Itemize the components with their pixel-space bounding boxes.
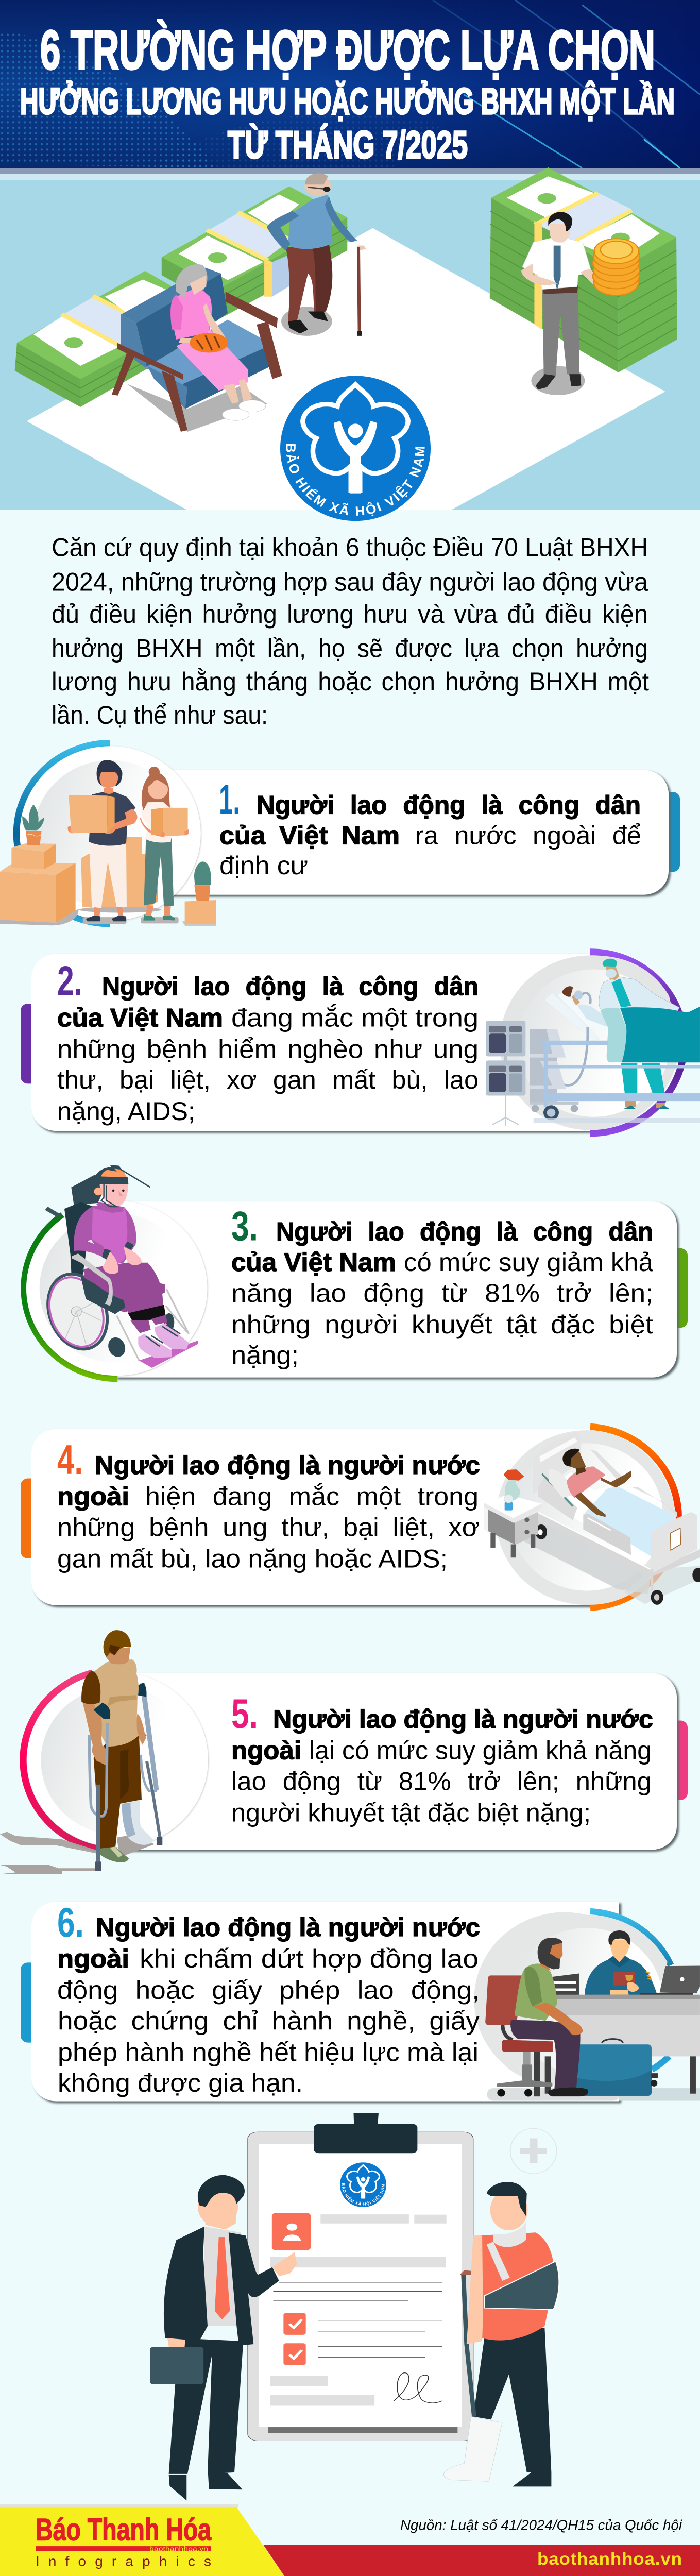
chair and woman bbox=[112, 264, 282, 432]
case 2 text: 2. bbox=[57, 958, 82, 1004]
intro paragraph: lần. Cụ thể như sau: bbox=[52, 701, 268, 730]
illustration: couple with boxes bbox=[0, 743, 216, 926]
money stack middle bbox=[162, 186, 347, 318]
case 3 text: Người lao động là công dân bbox=[276, 1217, 653, 1246]
case 5 text: 5. bbox=[231, 1690, 258, 1737]
intro paragraph bbox=[52, 533, 649, 730]
illustration: officer and foreign worker at desk bbox=[474, 1911, 700, 2101]
case 6 text: hoặc chứng chỉ hành nghề, giấy bbox=[58, 2006, 480, 2035]
injured man bbox=[443, 2182, 559, 2486]
case 3 text: năng lao động từ 81% trở lên; bbox=[231, 1279, 653, 1308]
case 3 text: 3. bbox=[231, 1203, 258, 1249]
case 6 text: không được gia hạn. bbox=[58, 2069, 303, 2097]
red bar bbox=[263, 2545, 700, 2576]
brand url small: baothanhhoa.vn bbox=[149, 2545, 208, 2553]
case 4 text: gan mất bù, lao nặng hoặc AIDS; bbox=[57, 1544, 448, 1573]
case 5 text: lại có mức suy giảm khả năng bbox=[309, 1736, 652, 1765]
case 2 text: của Việt Nam bbox=[57, 1003, 223, 1032]
accent tab bbox=[21, 1004, 46, 1083]
hero illustration background bbox=[0, 168, 700, 510]
case 3 text: của Việt Nam bbox=[231, 1248, 396, 1277]
brand rule bbox=[36, 2546, 211, 2551]
accent tab bbox=[21, 1479, 46, 1558]
brand subtitle: Infographics bbox=[36, 2553, 211, 2569]
case 2 text: đang mắc một trong bbox=[231, 1003, 479, 1032]
header banner bbox=[0, 0, 700, 168]
intro paragraph: lương hưu hằng tháng hoặc chọn hưởng BHXH một bbox=[52, 667, 649, 696]
footer bbox=[0, 2504, 700, 2576]
businessman bbox=[150, 2175, 297, 2500]
intro paragraph: 2024, những trường hợp sau đây người lao động vừa bbox=[52, 567, 648, 596]
money stack right bbox=[490, 167, 677, 372]
case 4 text: Người lao động là người nước bbox=[95, 1451, 480, 1480]
case 1 text: 1. bbox=[219, 776, 240, 823]
website: baothanhhoa.vn bbox=[537, 2549, 682, 2569]
case 6 text: 6. bbox=[57, 1900, 84, 1946]
case 3 text: có mức suy giảm khả bbox=[404, 1248, 654, 1277]
case 1 text bbox=[219, 776, 641, 880]
money stack left bbox=[15, 271, 210, 407]
case 2 text bbox=[57, 958, 479, 1126]
case 1 text: định cư bbox=[219, 851, 308, 880]
case 3 text: những người khuyết tật đặc biệt bbox=[231, 1310, 653, 1339]
case 5 text: người khuyết tật đặc biệt nặng; bbox=[231, 1798, 591, 1827]
case 5 text bbox=[231, 1690, 653, 1827]
case 5 text: ngoài bbox=[231, 1736, 301, 1765]
case 1 text: ra nước ngoài để bbox=[415, 821, 641, 850]
case 2 text: Người lao động là công dân bbox=[102, 972, 479, 1001]
case 1 text: của Việt Nam bbox=[219, 821, 400, 850]
case 4 text: 4. bbox=[57, 1436, 83, 1483]
intro paragraph: Căn cứ quy định tại khoản 6 thuộc Điều 70 Luật BHXH bbox=[52, 533, 648, 562]
case 4 text: hiện đang mắc một trong bbox=[145, 1482, 479, 1511]
accent tab bbox=[662, 1720, 688, 1800]
title bbox=[20, 19, 675, 167]
logo: Bảo hiểm xã hội Việt Nam bbox=[280, 376, 431, 521]
panel: case 4 bbox=[21, 1427, 700, 1607]
case 6 text: ngoài bbox=[57, 1944, 129, 1973]
accent tab bbox=[662, 1248, 688, 1328]
panel: case 6 bbox=[21, 1900, 700, 2103]
intro paragraph: đủ điều kiện hưởng lương hưu và vừa đủ điều kiện bbox=[52, 600, 648, 629]
case 6 text bbox=[57, 1900, 480, 2097]
old man with cane bbox=[267, 173, 366, 336]
small logo on clipboard: BẢO HIỂM XÃ HỘI VIỆT NAM bbox=[342, 2183, 384, 2206]
case 2 text: thư, bại liệt, xơ gan mất bù, lao bbox=[57, 1065, 479, 1094]
panel: case 1 bbox=[0, 743, 680, 926]
case 6 text: khi chấm dứt hợp đồng lao bbox=[140, 1944, 479, 1973]
case 1 text: Người lao động là công dân bbox=[257, 790, 641, 819]
panel: case 2 bbox=[21, 952, 700, 1133]
small logo on clipboard bbox=[340, 2162, 386, 2207]
case 4 text bbox=[57, 1436, 480, 1573]
case 2 text: những bệnh hiểm nghèo như ung bbox=[57, 1035, 479, 1063]
source note: Nguồn: Luật số 41/2024/QH15 của Quốc hội bbox=[400, 2517, 682, 2533]
yellow brand block bbox=[0, 2507, 284, 2576]
illustration: patient with doctor bbox=[486, 952, 700, 1133]
hero illustration bbox=[15, 167, 677, 510]
gold coins bbox=[593, 239, 640, 295]
accent tab bbox=[654, 792, 680, 872]
panel: case 3 bbox=[24, 1165, 688, 1380]
logo: Bảo hiểm xã hội Việt Nam: BẢO HIỂM XÃ HỘI VIỆT NAM bbox=[286, 444, 425, 516]
case 6 text: Người lao động là người nước bbox=[96, 1913, 480, 1942]
white floor bbox=[27, 228, 665, 510]
businessman with coins bbox=[521, 212, 601, 389]
illustration: man on crutches bbox=[0, 1630, 208, 1874]
case 6 text: động hoặc giấy phép lao động, bbox=[57, 1976, 480, 2005]
case 2 text: nặng, AIDS; bbox=[57, 1097, 195, 1126]
illustration: patient on hospital bed bbox=[484, 1427, 700, 1607]
case 6 text: phép hành nghề hết hiệu lực mà lại bbox=[58, 2038, 479, 2066]
brand name: Báo Thanh Hóa bbox=[36, 2513, 212, 2547]
intro paragraph: hưởng BHXH một lần, họ sẽ được lựa chọn hưởng bbox=[52, 634, 648, 663]
panel: case 5 bbox=[0, 1630, 688, 1874]
case 4 text: ngoài bbox=[57, 1482, 129, 1511]
case 3 text: nặng; bbox=[231, 1341, 299, 1369]
case 3 text bbox=[231, 1203, 654, 1369]
case 4 text: những bệnh ung thư, bại liệt, xơ bbox=[57, 1513, 480, 1541]
illustration: person in wheelchair bbox=[24, 1165, 207, 1379]
clipboard bbox=[248, 2113, 473, 2441]
plus icon bbox=[510, 2128, 557, 2174]
title: TỪ THÁNG 7/2025 bbox=[228, 124, 468, 167]
shadows on floor bbox=[127, 307, 585, 432]
case 5 text: lao động từ 81% trở lên; những bbox=[231, 1767, 652, 1795]
illustration: clipboard with two people bbox=[150, 2113, 559, 2500]
case 5 text: Người lao động là người nước bbox=[273, 1705, 653, 1734]
accent tab bbox=[21, 1962, 46, 2043]
